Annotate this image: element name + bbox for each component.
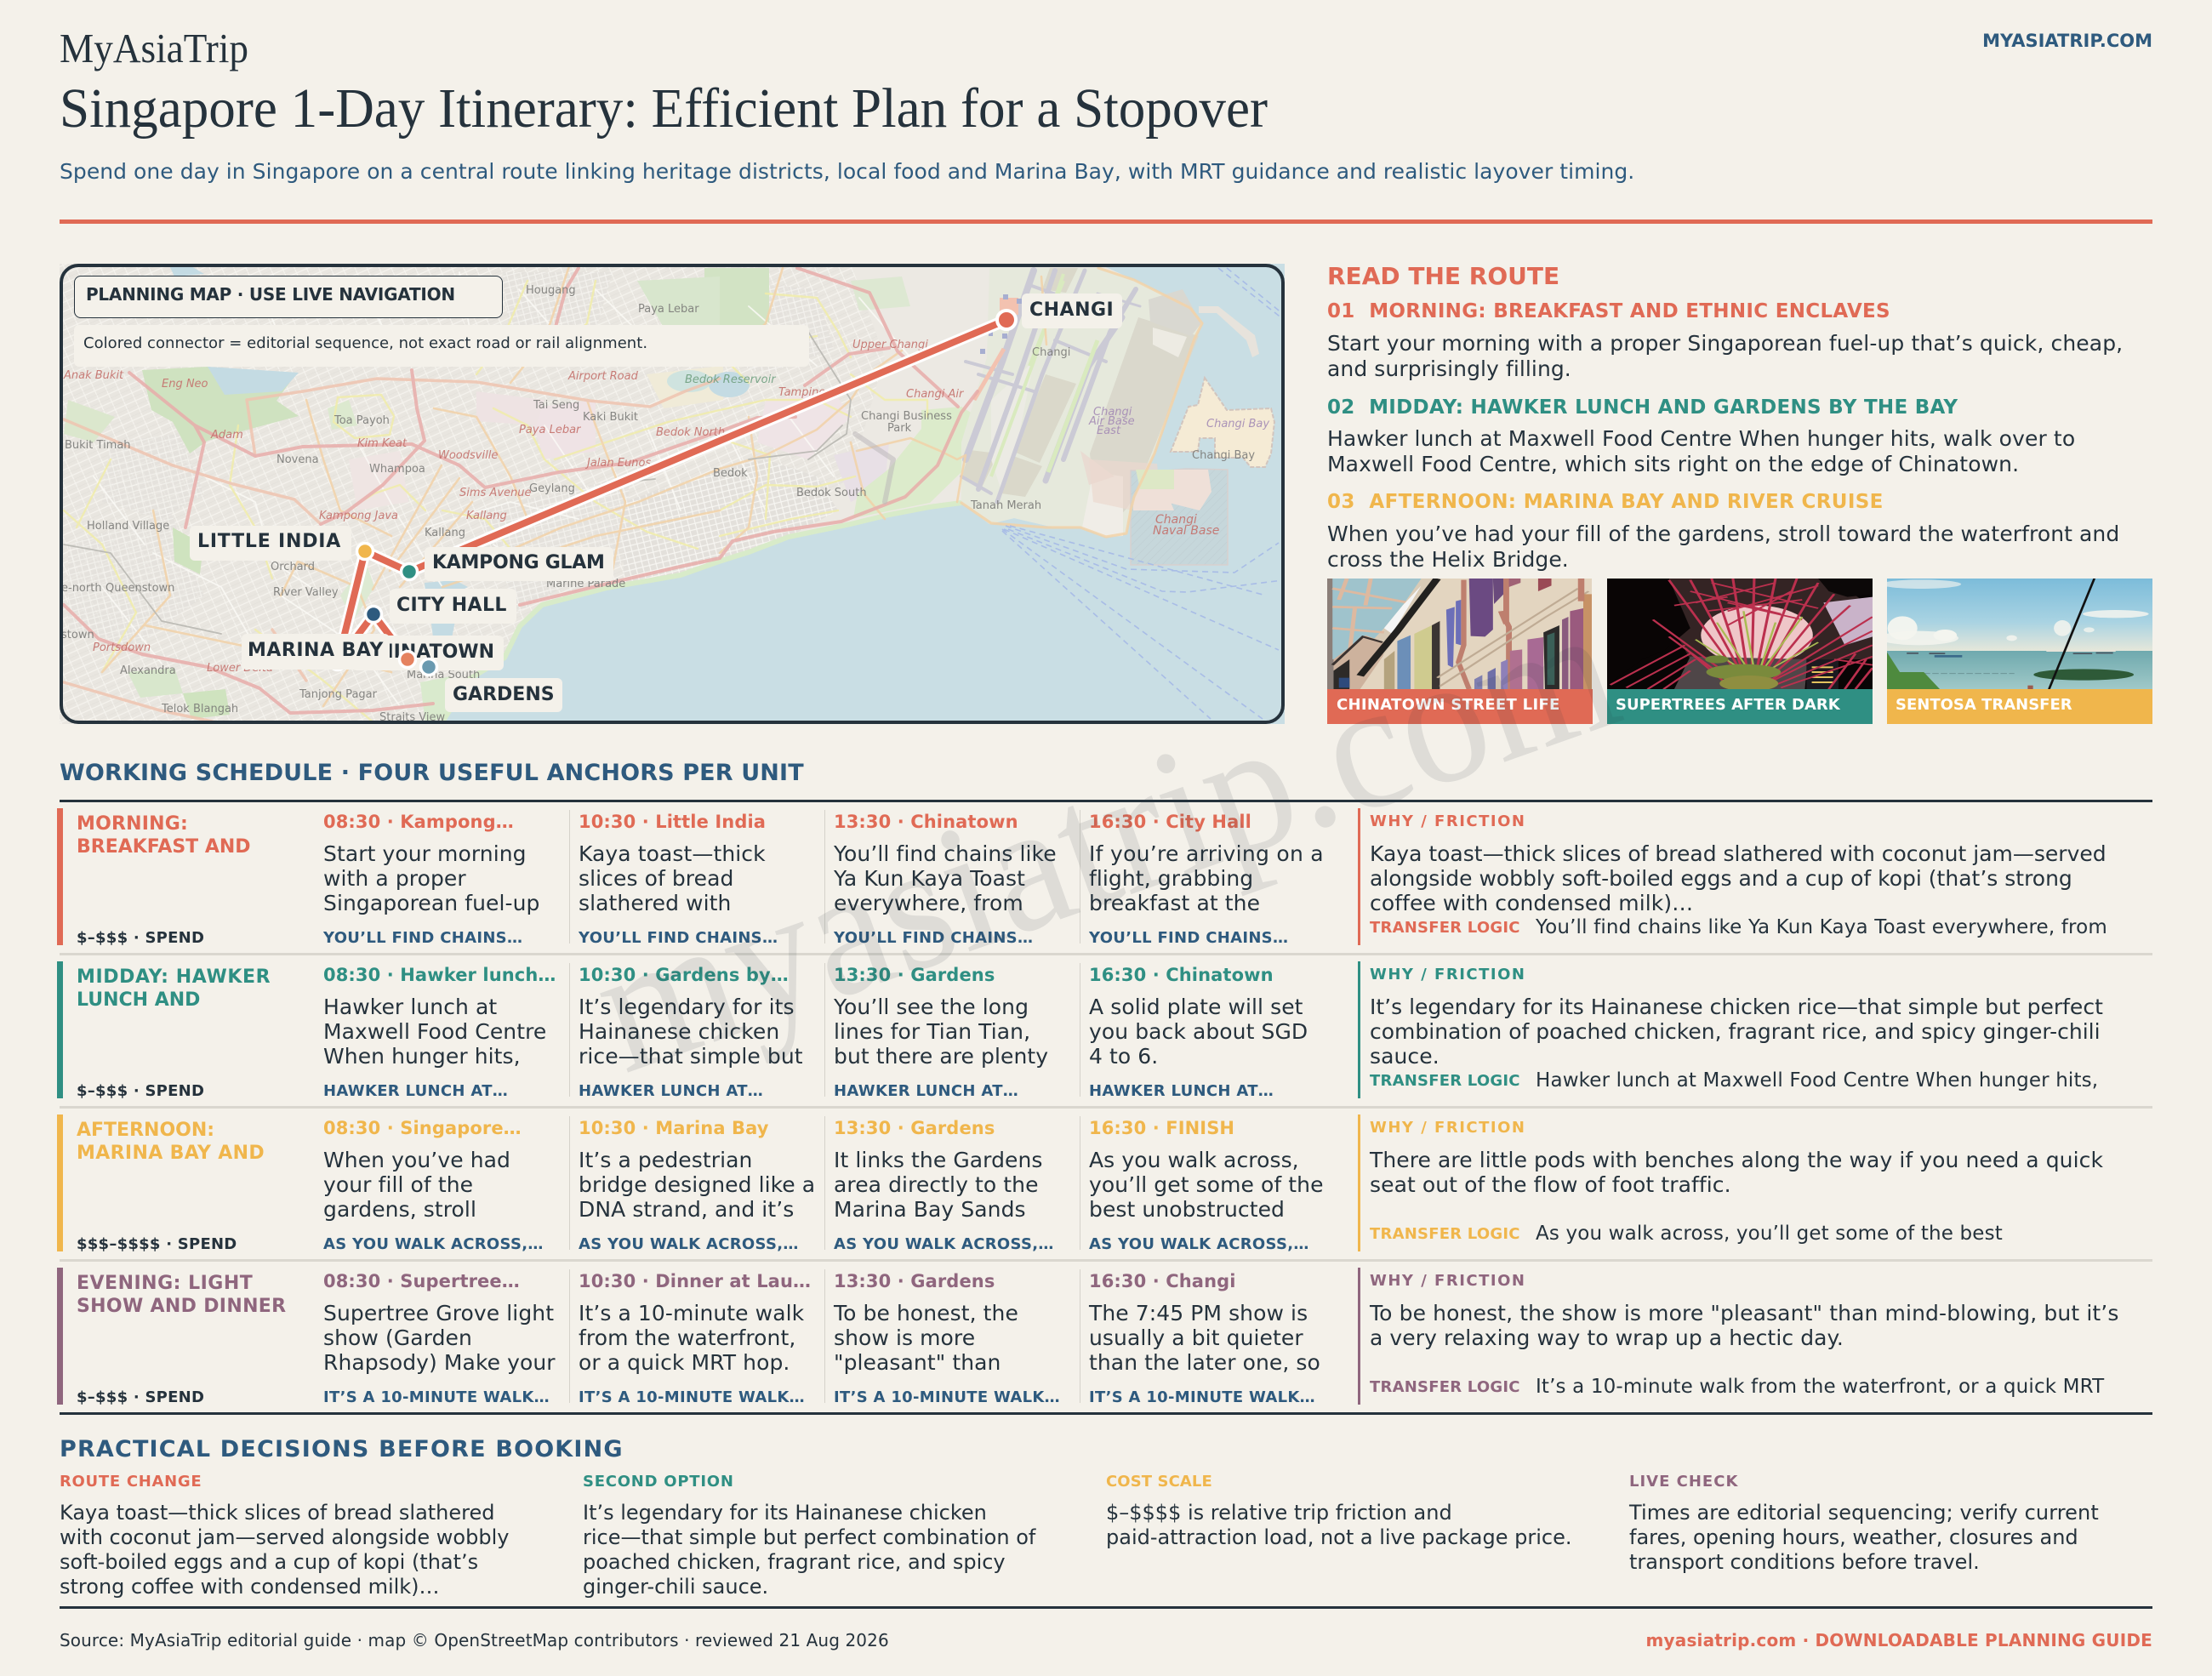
slot 16:30: usually a bit quieter [1089, 1325, 1303, 1350]
map note [74, 325, 809, 367]
map base and route: Tanah Merah [970, 499, 1041, 512]
map base and route: Straits View [379, 711, 445, 724]
slot 08:30: YOU’LL FIND CHAINS… [323, 929, 522, 947]
map base and route: Woodsville [438, 449, 498, 462]
photo: chinatown street life: CHINATOWN STREET LIFE [1337, 696, 1560, 714]
map base and route: Paya Lebar [638, 303, 699, 316]
slot 16:30: YOU’LL FIND CHAINS… [1089, 929, 1288, 947]
map base and route: River Valley [273, 586, 339, 599]
slot 16:30: breakfast at the [1089, 891, 1260, 915]
slot 10:30: 10:30 · Marina Bay [579, 1118, 769, 1138]
slot 08:30: 08:30 · Singapore… [323, 1118, 522, 1138]
why and transfer: TRANSFER LOGIC [1370, 1225, 1520, 1243]
route step 01 [1327, 300, 2123, 381]
why and transfer: As you walk across, you’ll get some of the best [1536, 1223, 2003, 1245]
photo: chinatown street life [1327, 579, 1593, 724]
map base and route: Alexandra [120, 664, 176, 677]
slot 13:30: 13:30 · Chinatown [834, 812, 1018, 832]
column: live check: LIVE CHECK [1629, 1473, 1738, 1491]
label: changi: CHANGI [1029, 299, 1114, 321]
route step 03: cross the Helix Bridge. [1327, 547, 1569, 572]
slot 13:30: everywhere, from [834, 891, 1023, 915]
schedule heading: WORKING SCHEDULE · FOUR USEFUL ANCHORS PER UNIT [60, 760, 804, 786]
slot 13:30: 13:30 · Gardens [834, 965, 995, 985]
row: afternoon [57, 1114, 2103, 1253]
source line: Source: MyAsiaTrip editorial guide · map © OpenStreetMap contributors · reviewed 21 Aug 2026 [60, 1630, 889, 1650]
slot 10:30: DNA strand, and it’s [579, 1197, 794, 1222]
slot 10:30: It’s legendary for its [579, 995, 795, 1019]
slot 08:30: 08:30 · Kampong… [323, 812, 514, 832]
map base and route: Novena [276, 453, 319, 466]
column: route change: with coconut jam—served alongside wobbly [60, 1525, 509, 1549]
why and transfer: To be honest, the show is more "pleasant" than mind-blowing, but it’s [1370, 1301, 2119, 1325]
slot 16:30: 4 to 6. [1089, 1044, 1158, 1069]
slot 13:30 [824, 1269, 1060, 1406]
why and transfer: Hawker lunch at Maxwell Food Centre When hunger hits, [1536, 1069, 2098, 1092]
unit label [77, 1273, 286, 1406]
markers: chinatown and gardens [398, 650, 439, 677]
column: live check: Times are editorial sequencing; verify current [1629, 1501, 2099, 1525]
map base and route: Anak Bukit [63, 369, 124, 382]
slot 08:30 [323, 1271, 556, 1406]
slot 16:30: best unobstructed [1089, 1197, 1285, 1222]
map base and route: Queenstown [105, 582, 174, 595]
map base and route: Bedok North [656, 426, 725, 439]
column: second option [583, 1472, 1093, 1599]
slot 13:30: 13:30 · Gardens [834, 1271, 995, 1291]
map badge [74, 276, 503, 318]
map base and route: Bedok [713, 467, 748, 480]
why and transfer: sauce. [1370, 1044, 1440, 1069]
slot 16:30 [1080, 1269, 1320, 1406]
map base and route: Upper Changi [852, 339, 928, 351]
slot 08:30: Supertree Grove light [323, 1301, 554, 1325]
map base and route: Marina South [407, 669, 480, 681]
slot 16:30: If you’re arriving on a [1089, 841, 1324, 866]
map base and route: Kim Keat [357, 437, 408, 450]
map base and route: Whampoa [369, 463, 425, 476]
route step 02: 02 MIDDAY: HAWKER LUNCH AND GARDENS BY THE BAY [1327, 396, 1958, 419]
column: cost scale: COST SCALE [1106, 1473, 1212, 1491]
watermark: myasiatrip.com [570, 565, 1640, 1111]
site link: MYASIATRIP.COM [1982, 31, 2152, 51]
map base and route: Lower Delta [207, 662, 273, 675]
map base and route: Jalan Eunos [584, 457, 651, 470]
slot 10:30: slathered with [579, 891, 731, 915]
slot 10:30 [569, 810, 778, 947]
slot 13:30: You’ll see the long [834, 995, 1029, 1019]
why and transfer [1358, 961, 2103, 1098]
map base and route: Kaki Bukit [583, 411, 638, 424]
slot 10:30: slices of bread [579, 866, 733, 891]
slot 13:30: AS YOU WALK ACROSS,… [834, 1235, 1054, 1253]
why and transfer: It’s a 10-minute walk from the waterfront, or a quick MRT [1536, 1376, 2104, 1398]
label: kampong glam [425, 547, 613, 581]
unit label [77, 1120, 265, 1253]
slot 13:30: HAWKER LUNCH AT… [834, 1082, 1018, 1100]
slot 16:30: than the later one, so [1089, 1350, 1320, 1375]
row: evening [57, 1268, 2119, 1406]
map base and route: Orchard [271, 561, 315, 573]
label: marina bay [242, 634, 390, 670]
unit label: $–$$$ · SPEND [77, 1082, 204, 1100]
map badge: PLANNING MAP · USE LIVE NAVIGATION [86, 284, 455, 305]
map base and route: Changi Bay [1192, 449, 1255, 462]
map base and route: Sims Avenue [459, 487, 531, 499]
slot 13:30: "pleasant" than [834, 1350, 1001, 1375]
route step 01: 01 MORNING: BREAKFAST AND ETHNIC ENCLAVES [1327, 300, 1890, 322]
unit label: AFTERNOON: [77, 1120, 214, 1141]
slot 08:30: your fill of the [323, 1172, 473, 1197]
label: little india [190, 526, 351, 561]
slot 16:30: 16:30 · City Hall [1089, 812, 1251, 832]
map base and route: East [1097, 425, 1121, 437]
slot 13:30: It links the Gardens [834, 1148, 1043, 1172]
slot 08:30 [323, 965, 556, 1100]
row: morning [57, 808, 2107, 947]
slot 08:30: When you’ve had [323, 1148, 510, 1172]
photo: supertrees after dark: SUPERTREES AFTER DARK [1616, 696, 1840, 714]
map base and route: Geylang [529, 482, 575, 495]
slot 10:30: 10:30 · Dinner at Lau… [579, 1271, 811, 1291]
unit label: BREAKFAST AND [77, 836, 251, 858]
label: kampong glam: KAMPONG GLAM [432, 552, 605, 573]
label: changi [1022, 294, 1122, 328]
slot 08:30 [323, 812, 539, 947]
map base and route: Airport Road [567, 370, 639, 383]
unit label [77, 966, 271, 1100]
slot 10:30: IT’S A 10-MINUTE WALK… [579, 1388, 805, 1406]
label: chinatown: CHINATOWN [364, 641, 494, 663]
why and transfer: There are little pods with benches along the way if you need a quick [1370, 1148, 2103, 1172]
slot 10:30: YOU’LL FIND CHAINS… [579, 929, 778, 947]
why and transfer: a very relaxing way to wrap up a hectic day. [1370, 1325, 1844, 1350]
map base and route: Kallang [425, 527, 465, 539]
route step 02: Maxwell Food Centre, which sits right on the edge of Chinatown. [1327, 452, 2019, 476]
map base and route: Marine Parade [546, 578, 625, 590]
why and transfer: TRANSFER LOGIC [1370, 1378, 1520, 1396]
slot 08:30: gardens, stroll [323, 1197, 476, 1222]
map base and route: Kampong Java [319, 510, 398, 522]
slot 08:30: IT’S A 10-MINUTE WALK… [323, 1388, 550, 1406]
map base and route: Paya Lebar [519, 424, 582, 436]
footer credit: myasiatrip.com · DOWNLOADABLE PLANNING GUIDE [1645, 1630, 2152, 1650]
map base and route: e-north [61, 582, 102, 595]
column: second option: rice—that simple but perfect combination of [583, 1525, 1035, 1549]
slot 16:30 [1080, 810, 1324, 947]
slot 13:30: IT’S A 10-MINUTE WALK… [834, 1388, 1060, 1406]
slot 08:30: Singaporean fuel-up [323, 891, 539, 915]
why and transfer [1358, 808, 2107, 945]
slot 13:30: lines for Tian Tian, [834, 1019, 1030, 1044]
why and transfer: TRANSFER LOGIC [1370, 919, 1520, 937]
slot 10:30: It’s a pedestrian [579, 1148, 752, 1172]
map base and route: Bedok South [796, 487, 867, 499]
why and transfer: alongside wobbly soft-boiled eggs and a cup of kopi (that’s strong [1370, 866, 2072, 891]
column: cost scale: paid-attraction load, not a live package price. [1106, 1525, 1571, 1549]
why and transfer: TRANSFER LOGIC [1370, 1072, 1520, 1090]
title: Singapore 1-Day Itinerary: Efficient Plan for a Stopover [60, 77, 1268, 140]
slot 08:30: Hawker lunch at [323, 995, 497, 1019]
photo: sentosa transfer [1887, 579, 2152, 724]
map base and route: Bedok Reservoir [685, 373, 777, 386]
row: midday [57, 961, 2103, 1100]
route step 02 [1327, 396, 2075, 476]
why and transfer: coffee with condensed milk)… [1370, 891, 1693, 915]
label: gardens [445, 678, 562, 712]
slot 08:30: 08:30 · Supertree… [323, 1271, 520, 1291]
column: route change [60, 1472, 570, 1599]
route step 01: and surprisingly filling. [1327, 356, 1571, 381]
map base and route: Hougang [526, 284, 576, 297]
slot 13:30: YOU’LL FIND CHAINS… [834, 929, 1033, 947]
slot 13:30 [824, 963, 1048, 1100]
why and transfer: WHY / FRICTION [1370, 966, 1525, 983]
column: cost scale [1106, 1472, 1616, 1599]
heading: PRACTICAL DECISIONS BEFORE BOOKING [60, 1436, 624, 1462]
slot 16:30: 16:30 · Changi [1089, 1271, 1236, 1291]
slot 16:30: A solid plate will set [1089, 995, 1303, 1019]
slot 13:30: show is more [834, 1325, 975, 1350]
why and transfer: WHY / FRICTION [1370, 1272, 1525, 1290]
slot 10:30: It’s a 10-minute walk [579, 1301, 804, 1325]
slot 13:30: Ya Kun Kaya Toast [834, 866, 1025, 891]
panel: practical decisions [60, 1434, 2152, 1599]
slot 08:30: Maxwell Food Centre [323, 1019, 546, 1044]
unit label [77, 813, 251, 947]
map base and route: Changi Bay [1206, 418, 1269, 430]
photo: supertrees after dark [1607, 579, 1873, 724]
label: little india: LITTLE INDIA [197, 531, 341, 552]
why and transfer: Kaya toast—thick slices of bread slathered with coconut jam—served [1370, 841, 2107, 866]
slot 10:30: Hainanese chicken [579, 1019, 779, 1044]
slot 13:30: Marina Bay Sands [834, 1197, 1026, 1222]
map base and route [60, 264, 1285, 724]
map base and route: Tanjong Pagar [299, 688, 378, 701]
slot 08:30: show (Garden [323, 1325, 472, 1350]
map base and route: Telok Blangah [161, 703, 238, 715]
slot 16:30: 16:30 · Chinatown [1089, 965, 1274, 985]
slot 13:30: area directly to the [834, 1172, 1039, 1197]
subtitle: Spend one day in Singapore on a central route linking heritage districts, local food and Marina Bay, with MRT guidance and realistic layover timing. [60, 159, 1634, 184]
slot 13:30 [824, 1116, 1054, 1253]
route step 03 [1327, 491, 2119, 572]
slot 16:30: flight, grabbing [1089, 866, 1253, 891]
map base and route: Park [887, 422, 912, 435]
slot 13:30 [824, 810, 1057, 947]
photo: sentosa transfer: SENTOSA TRANSFER [1896, 696, 2072, 714]
slot 10:30: rice—that simple but [579, 1044, 803, 1069]
heading: READ THE ROUTE [1327, 262, 1559, 290]
map base and route: Tai Seng [533, 399, 579, 412]
slot 10:30: 10:30 · Gardens by… [579, 965, 789, 985]
slot 08:30: When hunger hits, [323, 1044, 521, 1069]
route step 01: Start your morning with a proper Singaporean fuel-up that’s quick, cheap, [1327, 331, 2123, 356]
map base and route: Kallang [466, 510, 507, 522]
column: second option: ginger-chili sauce. [583, 1575, 768, 1599]
slot 08:30 [323, 1118, 544, 1253]
column: route change: ROUTE CHANGE [60, 1473, 202, 1491]
map frame [60, 264, 1285, 724]
slot 13:30: 13:30 · Gardens [834, 1118, 995, 1138]
slot 08:30: Start your morning [323, 841, 527, 866]
map base and route: Changi [1032, 346, 1070, 359]
panel: read the route [1327, 262, 2152, 724]
map base and route: Changi [1093, 406, 1132, 419]
slot 16:30: IT’S A 10-MINUTE WALK… [1089, 1388, 1315, 1406]
slot 10:30 [569, 1269, 811, 1406]
unit label: $–$$$ · SPEND [77, 929, 204, 947]
slot 16:30: As you walk across, [1089, 1148, 1299, 1172]
why and transfer: It’s legendary for its Hainanese chicken rice—that simple but perfect [1370, 995, 2103, 1019]
route step 03: 03 AFTERNOON: MARINA BAY AND RIVER CRUISE [1327, 491, 1884, 513]
slot 16:30: The 7:45 PM show is [1089, 1301, 1308, 1325]
why and transfer [1358, 1268, 2119, 1405]
map base and route: Bukit Timah [65, 439, 131, 452]
slot 10:30: or a quick MRT hop. [579, 1350, 790, 1375]
slot 08:30: AS YOU WALK ACROSS,… [323, 1235, 544, 1253]
slot 13:30: but there are plenty [834, 1044, 1048, 1069]
why and transfer: You’ll find chains like Ya Kun Kaya Toast everywhere, from [1536, 916, 2107, 938]
slot 08:30: with a proper [323, 866, 466, 891]
slot 10:30: from the waterfront, [579, 1325, 795, 1350]
slot 10:30: bridge designed like a [579, 1172, 815, 1197]
unit label: MORNING: [77, 813, 188, 835]
slot 16:30: HAWKER LUNCH AT… [1089, 1082, 1274, 1100]
map base and route: stown [61, 629, 94, 641]
unit label: MARINA BAY AND [77, 1143, 265, 1164]
unit label: $–$$$ · SPEND [77, 1388, 204, 1406]
slot 10:30 [569, 1116, 815, 1253]
slot 16:30: AS YOU WALK ACROSS,… [1089, 1235, 1309, 1253]
map base and route: Toa Payoh [334, 414, 390, 427]
column: second option: SECOND OPTION [583, 1473, 734, 1491]
slot 13:30: You’ll find chains like [834, 841, 1057, 866]
column: route change: soft-boiled eggs and a cup of kopi (that’s [60, 1550, 478, 1574]
unit label: LUNCH AND [77, 989, 200, 1011]
why and transfer: seat out of the flow of foot traffic. [1370, 1172, 1731, 1197]
map base and route: Adam [210, 429, 243, 442]
brand name: MyAsiaTrip [60, 25, 248, 71]
label: city hall: CITY HALL [396, 595, 507, 616]
slot 08:30: Rhapsody) Make your [323, 1350, 556, 1375]
slot 08:30: HAWKER LUNCH AT… [323, 1082, 508, 1100]
slot 16:30: 16:30 · FINISH [1089, 1118, 1234, 1138]
column: live check [1629, 1472, 2140, 1599]
why and transfer: WHY / FRICTION [1370, 812, 1525, 830]
slot 10:30: HAWKER LUNCH AT… [579, 1082, 763, 1100]
slot 08:30: 08:30 · Hawker lunch… [323, 965, 556, 985]
map base and route: Holland Village [87, 520, 169, 533]
column: route change: strong coffee with condensed milk)… [60, 1575, 440, 1599]
map base and route: Changi [1155, 513, 1197, 527]
map base and route: Changi Business [861, 410, 952, 423]
route step 03: When you’ve had your fill of the gardens, stroll toward the waterfront and [1327, 522, 2119, 546]
slot 10:30: AS YOU WALK ACROSS,… [579, 1235, 799, 1253]
unit label: EVENING: LIGHT [77, 1273, 253, 1294]
map base and route: Tampines [778, 386, 831, 399]
label: city hall [390, 589, 516, 624]
slot 10:30: 10:30 · Little India [579, 812, 766, 832]
slot 13:30: To be honest, the [834, 1301, 1018, 1325]
column: live check: fares, opening hours, weather, closures and [1629, 1525, 2078, 1549]
column: route change: Kaya toast—thick slices of bread slathered [60, 1501, 495, 1525]
slot 16:30: you’ll get some of the [1089, 1172, 1324, 1197]
column: second option: poached chicken, fragrant rice, and spicy [583, 1550, 1006, 1574]
why and transfer [1358, 1114, 2103, 1251]
unit label: $$$–$$$$ · SPEND [77, 1235, 237, 1253]
slot 16:30 [1080, 1116, 1324, 1253]
column: cost scale: $–$$$$ is relative trip friction and [1106, 1501, 1452, 1525]
slot 10:30: Kaya toast—thick [579, 841, 766, 866]
map base and route: Changi Air [906, 388, 965, 401]
label: chinatown [351, 636, 504, 670]
header rule [60, 219, 2152, 224]
slot 10:30 [569, 963, 803, 1100]
column: live check: transport conditions before travel. [1629, 1550, 1980, 1574]
route step 02: Hawker lunch at Maxwell Food Centre When hunger hits, walk over to [1327, 426, 2075, 451]
label: marina bay: MARINA BAY [248, 640, 384, 661]
why and transfer: WHY / FRICTION [1370, 1119, 1525, 1137]
unit label: MIDDAY: HAWKER [77, 966, 271, 988]
column: second option: It’s legendary for its Hainanese chicken [583, 1501, 987, 1525]
slot 16:30 [1080, 963, 1308, 1100]
map base and route: Air Base [1088, 415, 1135, 428]
unit label: SHOW AND DINNER [77, 1296, 286, 1317]
map base and route: Portsdown [93, 641, 151, 654]
map base and route: Naval Base [1153, 524, 1219, 538]
map note: Colored connector = editorial sequence, not exact road or rail alignment. [83, 334, 647, 352]
why and transfer: combination of poached chicken, fragrant rice, and spicy ginger-chili [1370, 1019, 2101, 1044]
panel: planning map [60, 264, 1285, 724]
slot 16:30: you back about SGD [1089, 1019, 1308, 1044]
map base and route: Eng Neo [162, 378, 208, 390]
label: gardens: GARDENS [453, 684, 555, 705]
